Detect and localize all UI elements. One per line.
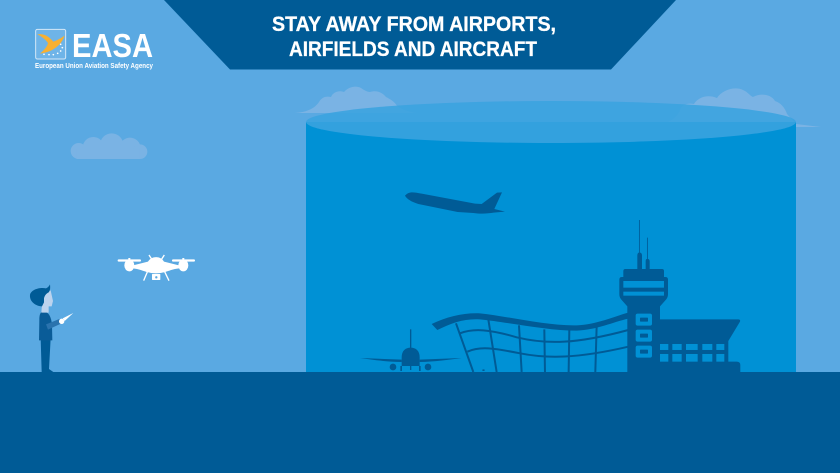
- EASA logo: [35, 27, 153, 70]
- tower antennas: [637, 220, 650, 269]
- person hair: [30, 284, 50, 306]
- person torso: [39, 312, 52, 340]
- cloud: left: [71, 133, 147, 159]
- terminal roof: [432, 313, 628, 331]
- icon: airplane in flight: [405, 192, 505, 214]
- small ground marker: [482, 369, 485, 371]
- cloud: behind cylinder left: [295, 87, 417, 113]
- title text: AIRFIELDS AND AIRCRAFT: [289, 38, 537, 61]
- cloud: behind cylinder right: [642, 88, 821, 127]
- no-fly cylinder: [306, 101, 796, 373]
- ground: [0, 372, 840, 473]
- logo emblem: [36, 29, 66, 59]
- airport terminal with curved roof: [432, 313, 628, 372]
- person flying drone: [30, 284, 73, 372]
- cylinder body: [306, 122, 796, 373]
- icon: drone: [118, 255, 195, 281]
- tower and building silhouette: [619, 269, 740, 373]
- tower shaft windows: [636, 314, 652, 358]
- icon: parked airplane: [360, 329, 462, 371]
- tower cab windows: [623, 281, 664, 288]
- person face and neck: [41, 290, 53, 313]
- logo wordmark: EASA: [72, 27, 153, 64]
- logo tagline: European Union Aviation Safety Agency: [35, 63, 153, 70]
- building windows: [660, 344, 724, 362]
- cylinder top ellipse: [306, 101, 796, 143]
- title banner: [164, 0, 676, 70]
- banner shape: [164, 0, 676, 70]
- terminal glass frame: [456, 319, 628, 372]
- person legs: [41, 338, 53, 372]
- control tower and building: [619, 220, 740, 373]
- person arm: [46, 319, 61, 330]
- person hand and remote: [59, 313, 73, 324]
- title text: STAY AWAY FROM AIRPORTS,: [272, 13, 556, 36]
